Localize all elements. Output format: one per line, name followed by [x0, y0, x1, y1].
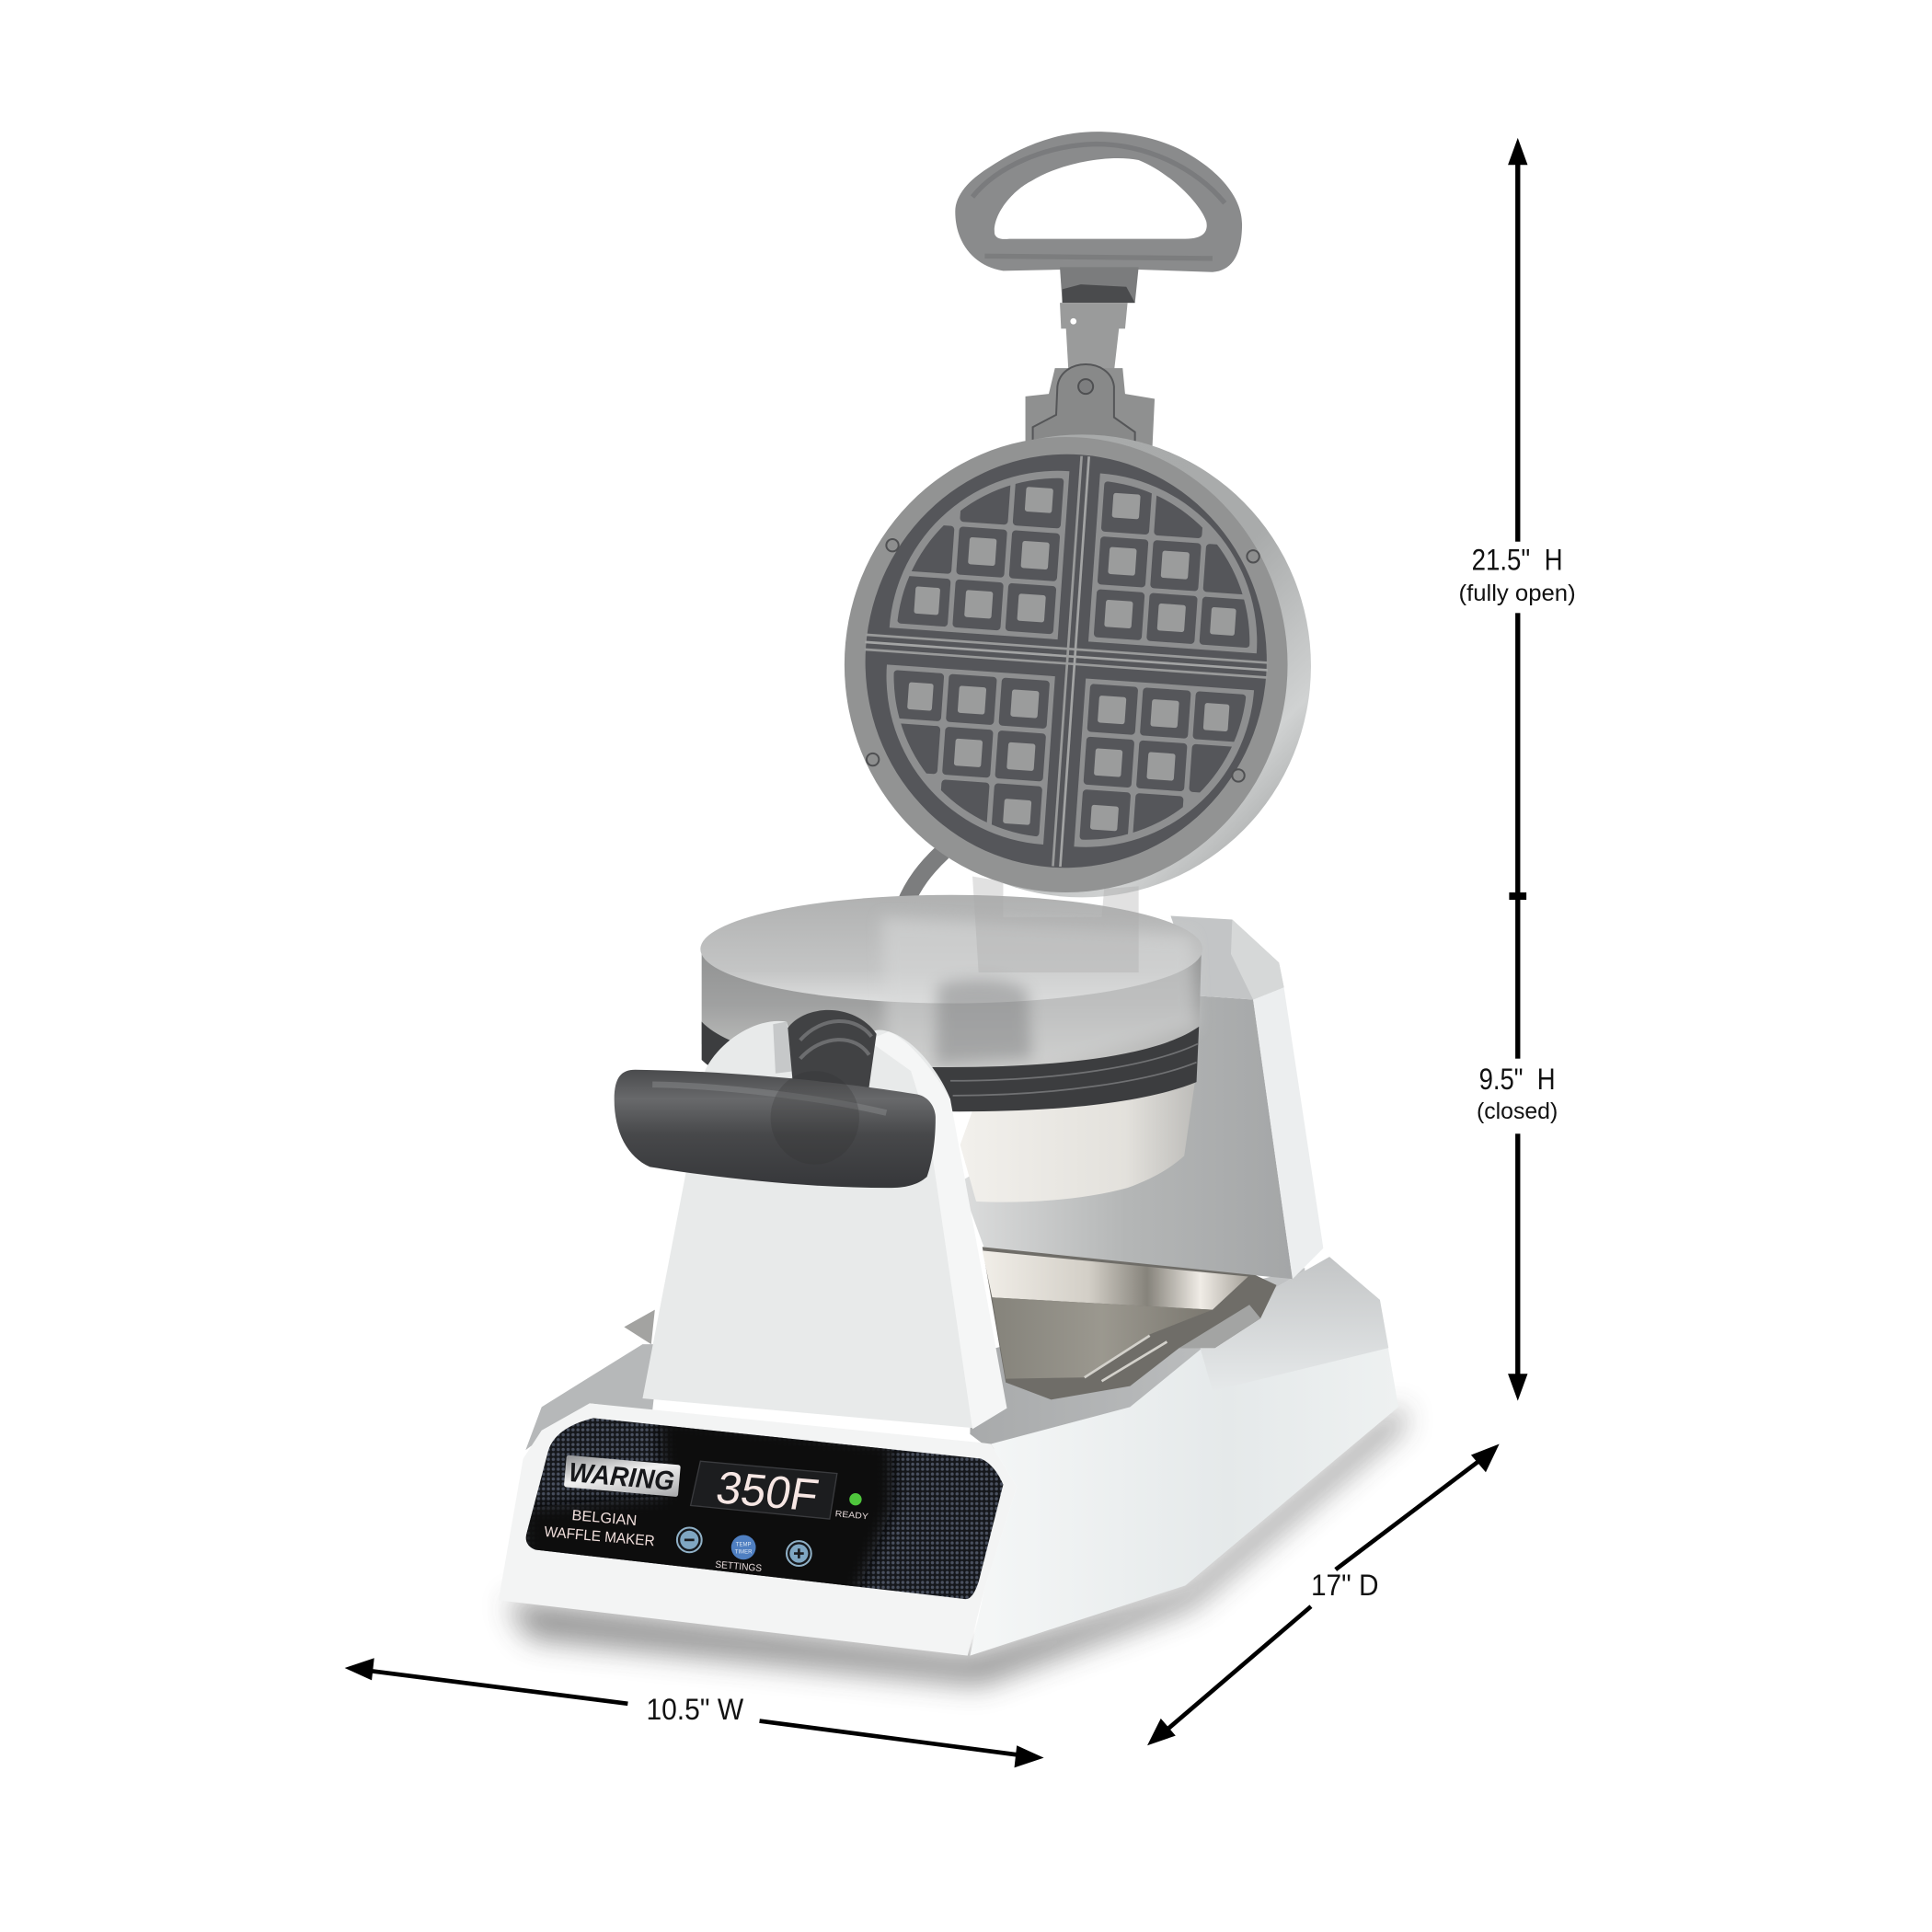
- label: depth: 17" D: [1311, 1569, 1379, 1602]
- label: width: 10.5" W: [646, 1693, 744, 1726]
- label: closed height: 9.5" H: [1479, 1063, 1556, 1096]
- ghost lid hinge: [972, 877, 1139, 972]
- base shadow: [507, 1407, 1406, 1684]
- label: fully open height: (fully open): [1459, 581, 1576, 606]
- control buttons: TIMER: [735, 1550, 753, 1556]
- ready indicator: [834, 1493, 869, 1521]
- control buttons: SETTINGS: [715, 1559, 763, 1574]
- waffle lid: [845, 434, 1311, 897]
- base front face: [499, 1403, 1017, 1656]
- open lid handle: [955, 132, 1242, 303]
- control panel: [523, 1416, 1003, 1613]
- product name: BELGIAN: [571, 1507, 638, 1529]
- WARING logo: WARING: [568, 1457, 675, 1497]
- base side face: [970, 1257, 1398, 1656]
- front upright: [642, 1010, 1006, 1429]
- height dimension arrow: [1508, 138, 1527, 1401]
- closed drum with ghosted lid: [700, 877, 1202, 1202]
- drip pan: [624, 1247, 1277, 1399]
- control buttons: TEMP: [736, 1543, 752, 1548]
- temperature display: 350F: [712, 1462, 822, 1521]
- base unit: [499, 1257, 1398, 1656]
- base left top face: [525, 1344, 660, 1450]
- control buttons: [677, 1527, 811, 1574]
- rear upright: [960, 915, 1323, 1279]
- depth dimension arrow: [1147, 1443, 1500, 1745]
- product illustration: waffle maker: [499, 132, 1406, 1684]
- ready indicator: READY: [834, 1509, 869, 1521]
- power cable: [904, 852, 943, 904]
- lid hinge bracket: [1026, 303, 1155, 458]
- base top strip: [1201, 1257, 1388, 1391]
- width dimension arrow: [345, 1658, 1044, 1767]
- base right top face: [970, 1268, 1305, 1450]
- product name: WAFFLE MAKER: [544, 1524, 655, 1549]
- label: fully open height: 21.5" H: [1472, 543, 1563, 576]
- product name: [544, 1507, 655, 1549]
- black centre of panel: [526, 1424, 902, 1588]
- label: fully open height: [1459, 543, 1576, 606]
- front dark handle: [615, 1070, 936, 1188]
- label: closed height: [1477, 1063, 1558, 1124]
- label: closed height: (closed): [1477, 1098, 1558, 1124]
